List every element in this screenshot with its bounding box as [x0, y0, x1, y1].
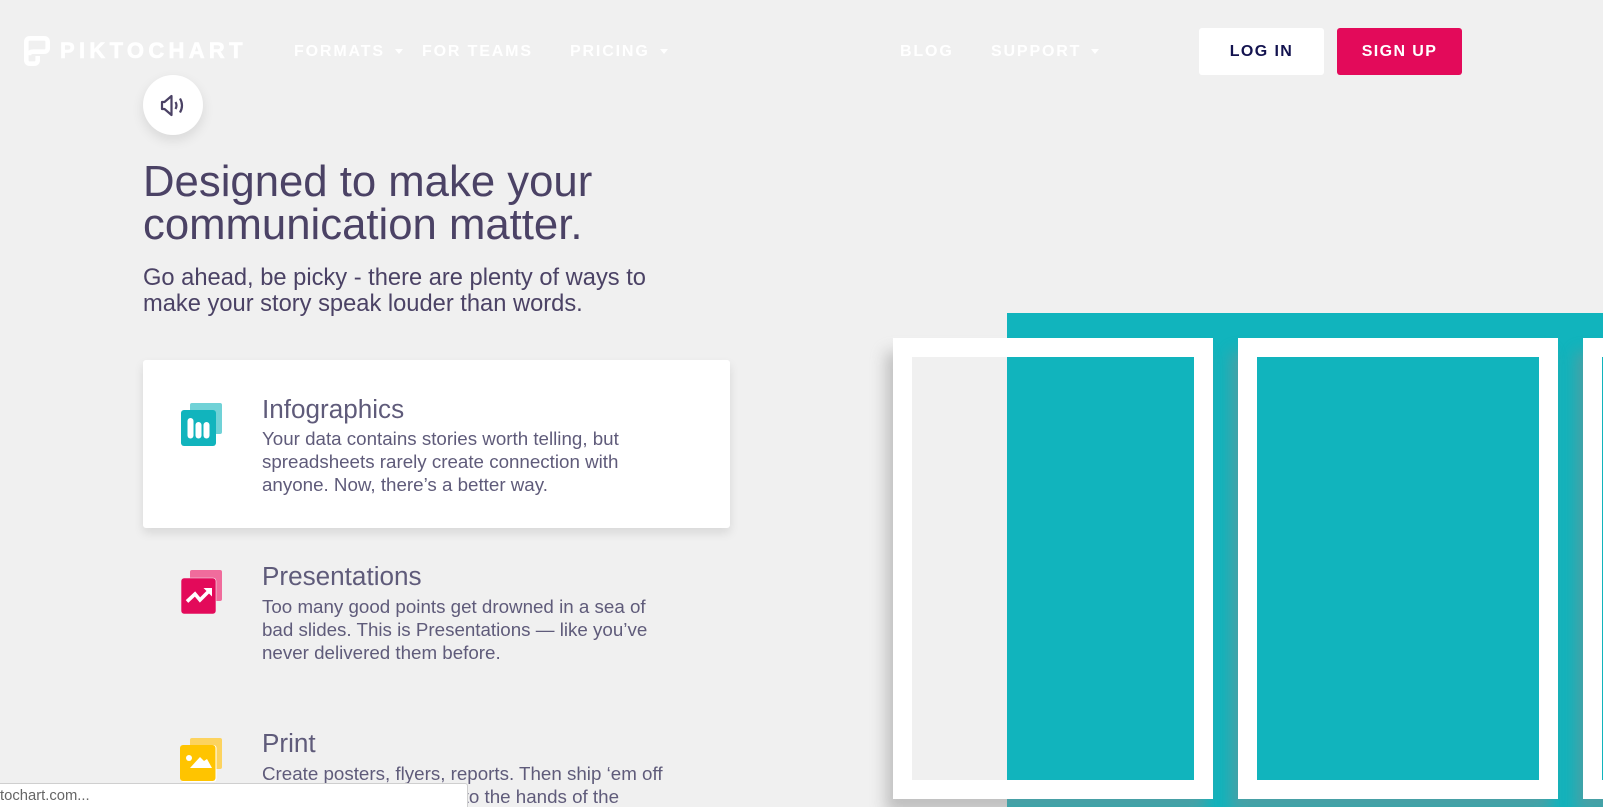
subtitle: make your story speak louder than words.: [143, 291, 583, 317]
icon: speaker button: [143, 75, 203, 135]
subtitle: [143, 265, 646, 317]
title: Designed to make your: [143, 157, 592, 206]
logo wordmark: PIKTOCHART: [60, 38, 247, 63]
icon: speaker glyph: [160, 94, 184, 116]
log in button: [1199, 28, 1324, 75]
nav: support: SUPPORT: [991, 43, 1081, 60]
sign up button: [1337, 28, 1462, 75]
presentations heading: Presentations: [262, 561, 422, 591]
nav: formats: FORMATS: [294, 43, 385, 60]
title: [143, 157, 592, 249]
presentations description: [262, 596, 647, 663]
print description: [262, 763, 663, 807]
image frame 1: [893, 338, 1213, 799]
nav: support caret: [1091, 49, 1099, 54]
log in button: LOG IN: [1230, 43, 1293, 60]
icon: print: [180, 738, 222, 782]
title: communication matter.: [143, 200, 582, 249]
sign up button: SIGN UP: [1362, 43, 1437, 60]
print description line 2: straight into the hands of the: [382, 786, 619, 807]
nav: formats caret: [395, 49, 403, 54]
teal background panel: [1007, 313, 1603, 807]
nav: pricing: PRICING: [570, 43, 650, 60]
nav: pricing caret: [660, 49, 668, 54]
infographics heading: Infographics: [262, 394, 404, 424]
nav: for teams: FOR TEAMS: [422, 43, 533, 60]
icon: presentations: [181, 570, 222, 614]
infographics description: anyone. Now, there’s a better way.: [262, 474, 548, 495]
navigation bar: [24, 28, 1462, 75]
subtitle: Go ahead, be picky - there are plenty of ways to: [143, 265, 646, 291]
image frame 2: [1238, 338, 1558, 799]
presentations description: never delivered them before.: [262, 642, 501, 663]
image frame 3: [1583, 338, 1603, 799]
presentations description: Too many good points get drowned in a sea of: [262, 596, 646, 617]
infographics description: spreadsheets rarely create connection with: [262, 451, 618, 472]
browser status bar: [0, 783, 468, 807]
print description line 1: Create posters, flyers, reports. Then ship ‘em off: [262, 763, 663, 784]
panel: infographics card: [143, 360, 730, 528]
nav: blog: BLOG: [900, 43, 954, 60]
print heading: Print: [262, 728, 316, 758]
presentations description: bad slides. This is Presentations — like you’ve: [262, 619, 647, 640]
infographics description: Your data contains stories worth telling, but: [262, 428, 619, 449]
infographics description: [262, 428, 619, 495]
logo icon: [24, 36, 50, 66]
icon: infographics: [181, 403, 222, 446]
browser status bar: tochart.com...: [0, 788, 90, 804]
